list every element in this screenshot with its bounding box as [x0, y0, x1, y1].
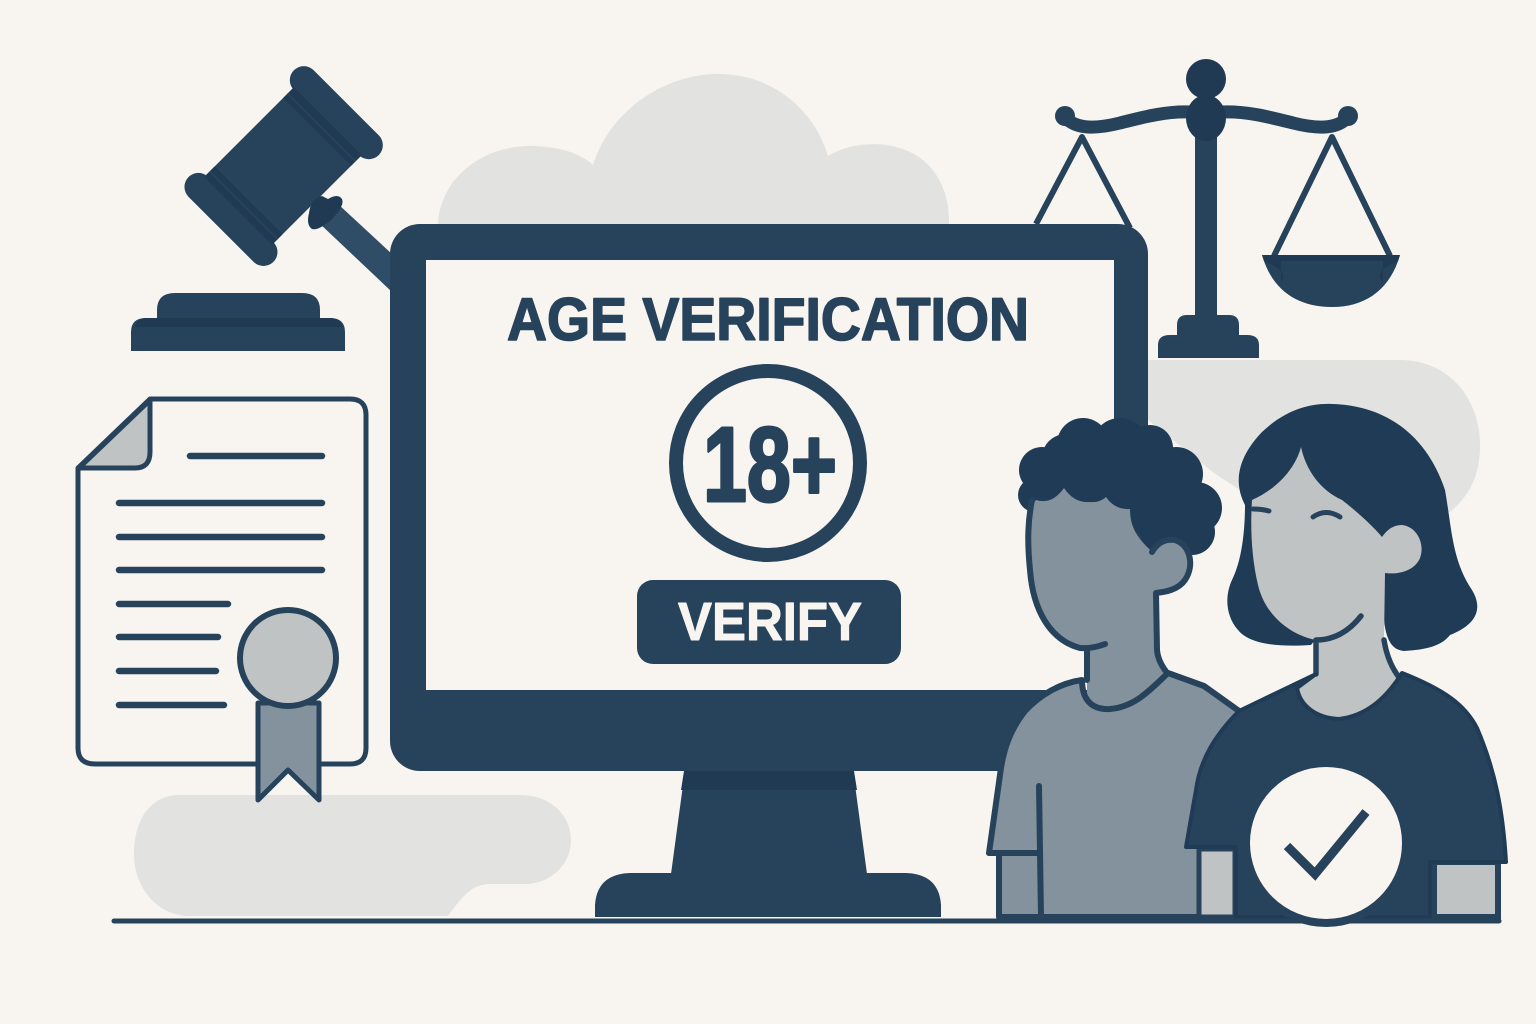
scales of justice: [1036, 59, 1400, 358]
background blob lower left: [134, 795, 571, 916]
seal: [240, 610, 336, 706]
monitor: [390, 224, 1148, 917]
boy face outline: [1028, 500, 1190, 680]
person left: [989, 418, 1239, 917]
verify button: [637, 580, 901, 664]
post: [1195, 118, 1217, 318]
stand: [671, 770, 867, 874]
person right: [1186, 404, 1506, 917]
pan shading: [1262, 255, 1400, 282]
left pan strings: [1036, 137, 1130, 228]
verify button: VERIFY: [678, 592, 862, 652]
boy t-shirt: [989, 673, 1239, 917]
gavel handle: [318, 204, 392, 292]
gavel sound block: [131, 293, 345, 351]
girl eyes: [1253, 509, 1340, 517]
legal document: [78, 399, 366, 800]
gavel collar: [308, 196, 343, 229]
curly hair: [1018, 418, 1222, 557]
ribbon: [258, 703, 319, 800]
right pan strings: [1274, 137, 1390, 256]
girl smile and neck line: [1316, 616, 1402, 681]
gavel: [178, 60, 392, 292]
girl hair: [1227, 404, 1477, 651]
girl arm right: [1434, 862, 1498, 917]
scale base: [1158, 315, 1259, 358]
background cloud: [438, 74, 949, 224]
top finial: [1186, 59, 1226, 99]
sleeve lines: [989, 786, 1041, 917]
screen: [426, 260, 1114, 690]
right pan: [1262, 255, 1400, 307]
monitor bezel: [390, 224, 1148, 771]
beam: [1068, 112, 1345, 127]
girl face and neck: [1251, 447, 1422, 720]
screen title: AGE VERIFICATION: [507, 286, 1029, 353]
check badge: [1246, 763, 1406, 923]
boy face and neck: [1028, 488, 1190, 715]
girl t-shirt: [1186, 673, 1506, 917]
folded corner: [79, 400, 150, 468]
document text lines: [119, 456, 322, 705]
gavel head: [178, 60, 389, 272]
girl arm left: [1199, 849, 1235, 917]
background blob right: [1148, 360, 1480, 512]
document sheet: [78, 399, 366, 764]
18+ badge: 18+: [703, 406, 837, 524]
ground line: [114, 918, 1499, 924]
18+ badge: [676, 371, 860, 555]
stand base: [595, 873, 941, 917]
